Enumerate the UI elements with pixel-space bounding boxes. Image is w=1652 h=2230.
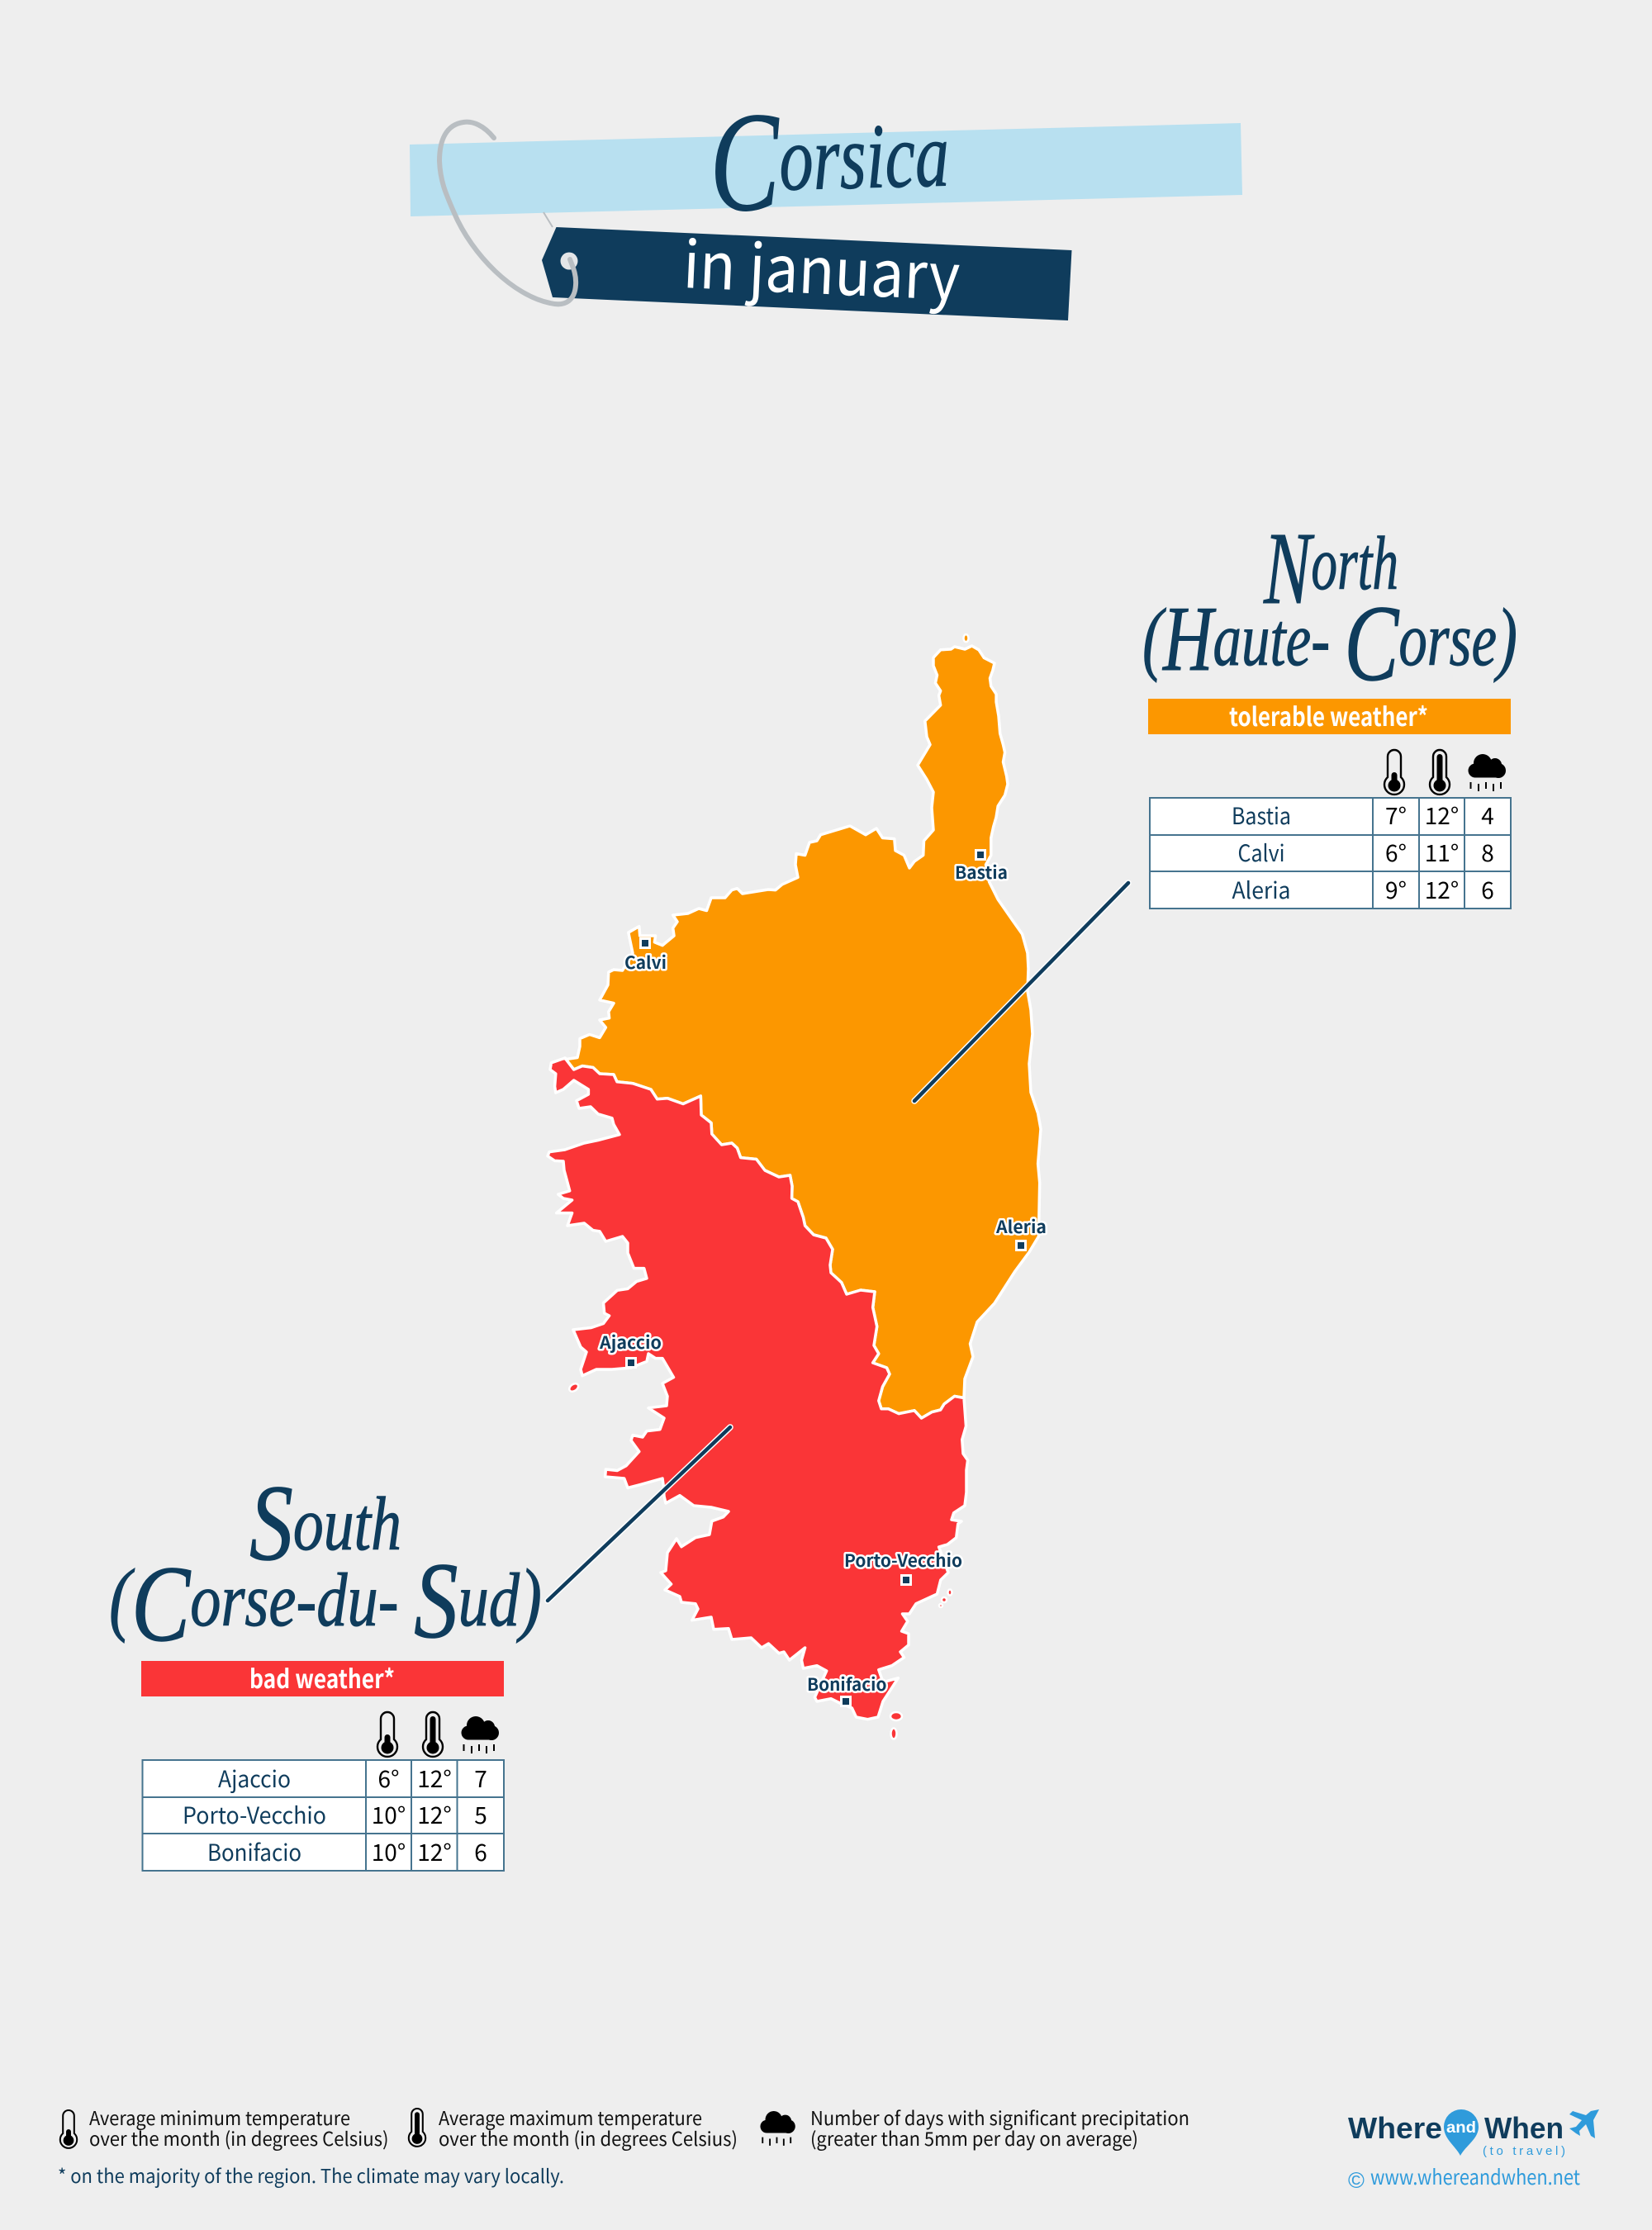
heading: Haute-Corse: C xyxy=(1344,582,1400,704)
title: Corsica: C xyxy=(708,83,783,242)
heading: Corse-du-Sud: ) xyxy=(516,1552,542,1644)
row: Aleria: Aleria xyxy=(1232,873,1290,906)
row: Bonifacio: 12° xyxy=(417,1835,452,1868)
copyright line: © xyxy=(1348,2168,1365,2193)
icon: minimum temperature xyxy=(377,1712,397,1757)
islets: south xyxy=(567,1382,952,1739)
table: north cities xyxy=(1150,798,1511,909)
row: Bastia: 12° xyxy=(1425,799,1459,832)
icon: maximum temperature xyxy=(423,1712,443,1757)
legend: maximum temperature xyxy=(409,2103,738,2152)
legend: precipitation: Number of days with significant precipitation xyxy=(810,2103,1189,2131)
heading: Haute-Corse: aute- xyxy=(1213,597,1344,681)
row: Bastia: 4 xyxy=(1481,799,1494,832)
navy tag xyxy=(542,227,1072,320)
footnote: * on the majority of the region. The climate may vary locally. xyxy=(58,2161,564,2189)
city marker and label: Aleria xyxy=(995,1214,1047,1250)
tagline: (to travel) xyxy=(1483,2144,1565,2158)
heading: Haute-Corse: H xyxy=(1161,588,1216,690)
row: Calvi: 8 xyxy=(1481,836,1494,869)
row: Bastia: Bastia xyxy=(1232,799,1291,832)
heading: Haute-Corse: ( xyxy=(1142,591,1166,683)
region: Haute-Corse (orange) xyxy=(565,646,1041,1418)
legend: minimum temperature xyxy=(60,2103,389,2152)
region: Corse-du-Sud (red) xyxy=(548,1058,968,1720)
legend: maximum temperature: Average maximum temperature xyxy=(439,2103,702,2131)
row: Ajaccio: 12° xyxy=(417,1762,452,1795)
row: Porto-Vecchio: 12° xyxy=(417,1798,452,1831)
legend: minimum temperature: over the month (in degrees Celsius) xyxy=(89,2123,388,2152)
heading: Corse-du-Sud: ( xyxy=(109,1552,135,1644)
row: Calvi: Calvi xyxy=(1237,836,1285,869)
row: Porto-Vecchio: 5 xyxy=(474,1798,487,1831)
row: Porto-Vecchio: Porto-Vecchio xyxy=(183,1798,326,1831)
title: Corsica: orsica xyxy=(778,103,951,211)
row: Aleria: 12° xyxy=(1425,873,1459,906)
legend xyxy=(58,2103,1189,2189)
city marker and label: Ajaccio xyxy=(599,1330,662,1368)
badge text: tolerable weather* xyxy=(1229,696,1428,733)
leader line: north xyxy=(914,883,1128,1101)
row: Bonifacio xyxy=(207,1835,487,1868)
wordmark: When: When xyxy=(1484,2111,1564,2145)
heading: Haute-Corse: ) xyxy=(1493,591,1517,683)
legend: precipitation xyxy=(760,2103,1189,2152)
row: Porto-Vecchio: 10° xyxy=(372,1798,406,1831)
legend: precipitation: (greater than 5mm per day on average) xyxy=(810,2123,1138,2152)
islet: north cape xyxy=(963,634,968,642)
city marker and label: Bastia: Bastia xyxy=(955,860,1008,885)
row: Bonifacio: Bonifacio xyxy=(207,1835,301,1868)
wordmark: Where: Where xyxy=(1348,2111,1442,2145)
row: Aleria: 6 xyxy=(1481,873,1494,906)
badge text: bad weather* xyxy=(249,1658,395,1696)
row: Calvi xyxy=(1237,836,1494,869)
icon: maximum temperature xyxy=(1430,750,1450,795)
map of Corsica xyxy=(548,634,1047,1739)
legend: minimum temperature: Average minimum temperature xyxy=(89,2103,350,2131)
icon: plane xyxy=(1569,2109,1599,2138)
legend: maximum temperature: over the month (in degrees Celsius) xyxy=(439,2123,738,2152)
icon: precipitation xyxy=(1469,754,1506,791)
heading: North: orth xyxy=(1311,521,1398,605)
heading: North: N xyxy=(1263,512,1315,626)
heading: South: S xyxy=(249,1462,293,1583)
table: south cities xyxy=(142,1760,504,1871)
tag hole xyxy=(560,253,578,269)
heading: Corse-du-Sud: C xyxy=(131,1543,192,1664)
heading: Corse-du-Sud: S xyxy=(414,1540,458,1661)
heading: Corse-du-Sud: ud xyxy=(458,1558,520,1642)
city marker and label: Calvi xyxy=(624,938,667,975)
title banner xyxy=(410,78,1242,320)
row: Ajaccio: 7 xyxy=(474,1762,487,1795)
panel: south xyxy=(109,1462,542,1871)
subtitle: in january: in january xyxy=(681,214,962,319)
icon: minimum temperature xyxy=(1384,750,1404,795)
row: Aleria: 9° xyxy=(1385,873,1407,906)
logo: Where and When xyxy=(1348,2109,1599,2193)
weather badge: bad xyxy=(141,1661,504,1696)
row: Bonifacio: 6 xyxy=(474,1835,487,1868)
heading: Corse-du-Sud: orse-du- xyxy=(190,1558,414,1642)
row: Ajaccio: 6° xyxy=(378,1762,399,1795)
panel: north xyxy=(1142,512,1517,909)
row: Ajaccio xyxy=(218,1762,487,1795)
row: Ajaccio: Ajaccio xyxy=(218,1762,291,1795)
pin text: and xyxy=(1446,2119,1476,2137)
city marker and label: Calvi: Calvi xyxy=(624,950,667,975)
row: Aleria xyxy=(1232,873,1494,906)
pin icon xyxy=(1444,2109,1479,2156)
city marker and label: Porto-Vecchio: Porto-Vecchio xyxy=(844,1548,962,1573)
city marker and label: Aleria: Aleria xyxy=(995,1214,1047,1239)
tag string fragment xyxy=(544,212,553,227)
row: Calvi: 11° xyxy=(1425,836,1459,869)
row: Bastia xyxy=(1232,799,1494,832)
copyright line: www.whereandwhen.net xyxy=(1370,2161,1580,2191)
row: Porto-Vecchio xyxy=(183,1798,487,1831)
city marker and label: Porto-Vecchio xyxy=(844,1548,962,1584)
icon: precipitation xyxy=(461,1716,499,1753)
leader line: south xyxy=(548,1427,730,1601)
grey tag ring xyxy=(439,122,576,304)
weather badge: tolerable xyxy=(1148,699,1511,734)
city marker and label: Ajaccio: Ajaccio xyxy=(599,1330,662,1355)
heading: South: outh xyxy=(293,1482,401,1566)
row: Calvi: 6° xyxy=(1385,836,1407,869)
city marker and label: Bonifacio: Bonifacio xyxy=(807,1672,887,1696)
row: Bonifacio: 10° xyxy=(372,1835,406,1868)
light blue title band xyxy=(410,123,1242,216)
heading: Haute-Corse: orse xyxy=(1398,597,1497,681)
row: Bastia: 7° xyxy=(1385,799,1407,832)
